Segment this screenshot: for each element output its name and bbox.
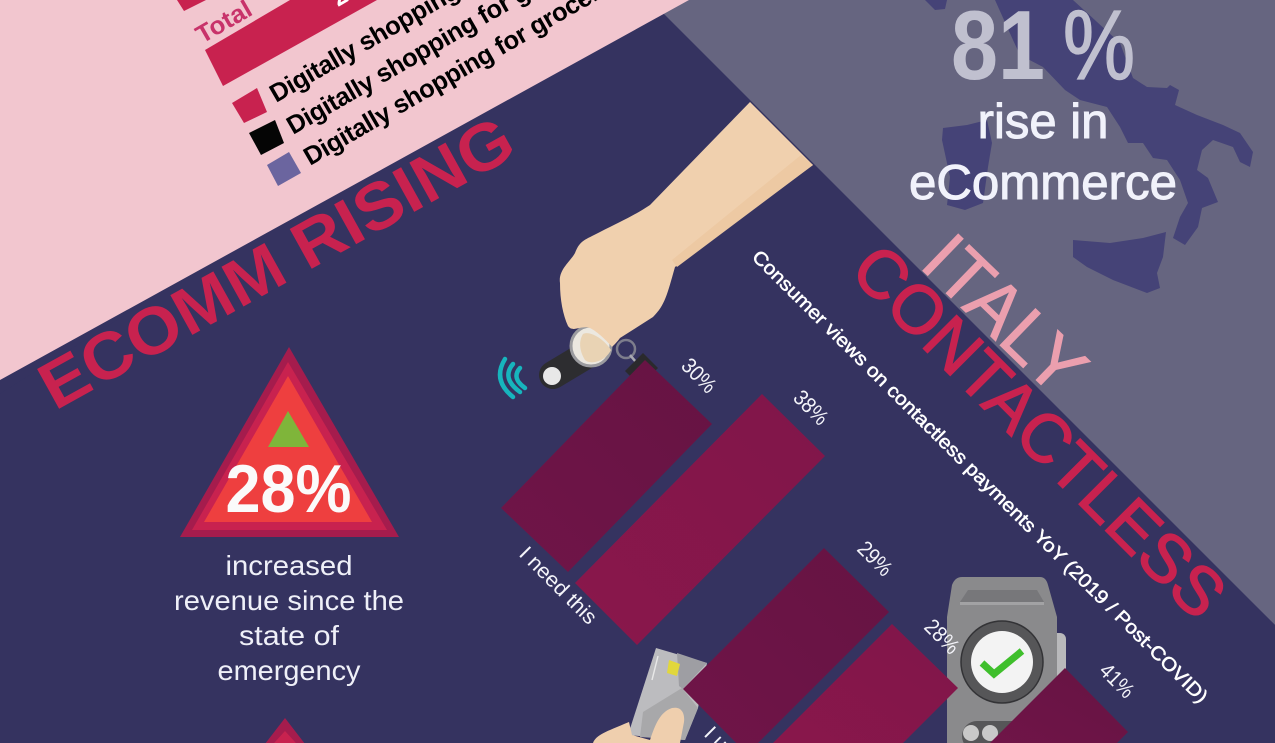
- stat caption: eCommerce: [909, 156, 1177, 210]
- upper bar fragment: [177, 0, 206, 11]
- icon: hand with card: [593, 648, 707, 743]
- bar: third group 2019: [987, 668, 1128, 743]
- terminal slot: [960, 590, 1044, 602]
- heading: CONTACTLESS: CONTACTLESS: [837, 230, 1240, 633]
- panel: pink ecommerce: [0, 0, 689, 380]
- icon: contactless waves: [500, 359, 525, 397]
- panel: Italy grey: [640, 0, 1275, 625]
- italy map: [925, 0, 1253, 293]
- stat: 81% rise in eCommerce: [909, 0, 1177, 210]
- bar: I need this post-COVID: [575, 394, 825, 645]
- stat caption: increased revenue: emergency: [218, 655, 360, 686]
- silver ring: [571, 326, 611, 366]
- arm shadow: [672, 155, 813, 267]
- value labels: 38%: [788, 385, 834, 430]
- stat triangle: 28%: [180, 347, 399, 537]
- card shaded bottom: [640, 688, 698, 740]
- terminal side button: [1050, 633, 1066, 743]
- value labels: 41%: [1094, 658, 1140, 703]
- legend swatch: black: [249, 120, 284, 155]
- stat caption: increased revenue: [174, 550, 404, 686]
- bar: second group post-COVID: [759, 624, 958, 743]
- category label: I need this: I need this: [514, 542, 601, 629]
- legend swatch: crimson: [232, 88, 267, 123]
- legend: [232, 0, 703, 186]
- hand: [593, 708, 684, 743]
- icon: check mark: [982, 651, 1022, 674]
- small ring: [617, 340, 635, 358]
- next triangle top: [258, 718, 312, 743]
- value labels: 30%: [676, 353, 722, 398]
- chart title: Consumer views on contactless payments YoY (2019 / Post-COVID): [747, 247, 1211, 708]
- bar: second group 2019: [683, 548, 889, 743]
- icon: hand holding key fob: [543, 102, 813, 386]
- terminal keys: [962, 721, 1032, 743]
- value labels: [676, 353, 1140, 703]
- legend swatch: purple: [267, 152, 301, 186]
- card chip: [667, 660, 680, 676]
- chart: consumer views on contactless payments: [501, 247, 1211, 743]
- stat caption: increased revenue: revenue since the: [174, 585, 404, 616]
- key tag: [625, 353, 658, 386]
- stat caption: increased revenue: state of: [239, 620, 339, 651]
- card shaded top: [677, 653, 707, 689]
- terminal screen: [961, 621, 1043, 703]
- heading: ECOMM RISING: ECOMM RISING: [26, 101, 526, 423]
- value labels: 28%: [919, 614, 965, 659]
- key fob body: [553, 348, 598, 375]
- terminal body: [947, 577, 1057, 743]
- stat number: 28%: [226, 451, 352, 527]
- heading: ITALY: ITALY: [907, 218, 1103, 411]
- icon: green up arrow: [268, 411, 309, 447]
- stat caption: increased revenue: increased: [226, 550, 352, 581]
- bar: I need this 2019: [501, 360, 712, 572]
- card: [628, 648, 707, 740]
- card name: [652, 656, 658, 680]
- key fob dot: [543, 367, 561, 385]
- icon: payment terminal: [947, 577, 1066, 743]
- total bar: [205, 0, 377, 86]
- arm: [560, 102, 813, 347]
- value labels: 29%: [852, 536, 898, 581]
- stat caption: [909, 95, 1177, 210]
- stat caption: rise in: [978, 95, 1108, 149]
- thumb over ring: [580, 333, 611, 362]
